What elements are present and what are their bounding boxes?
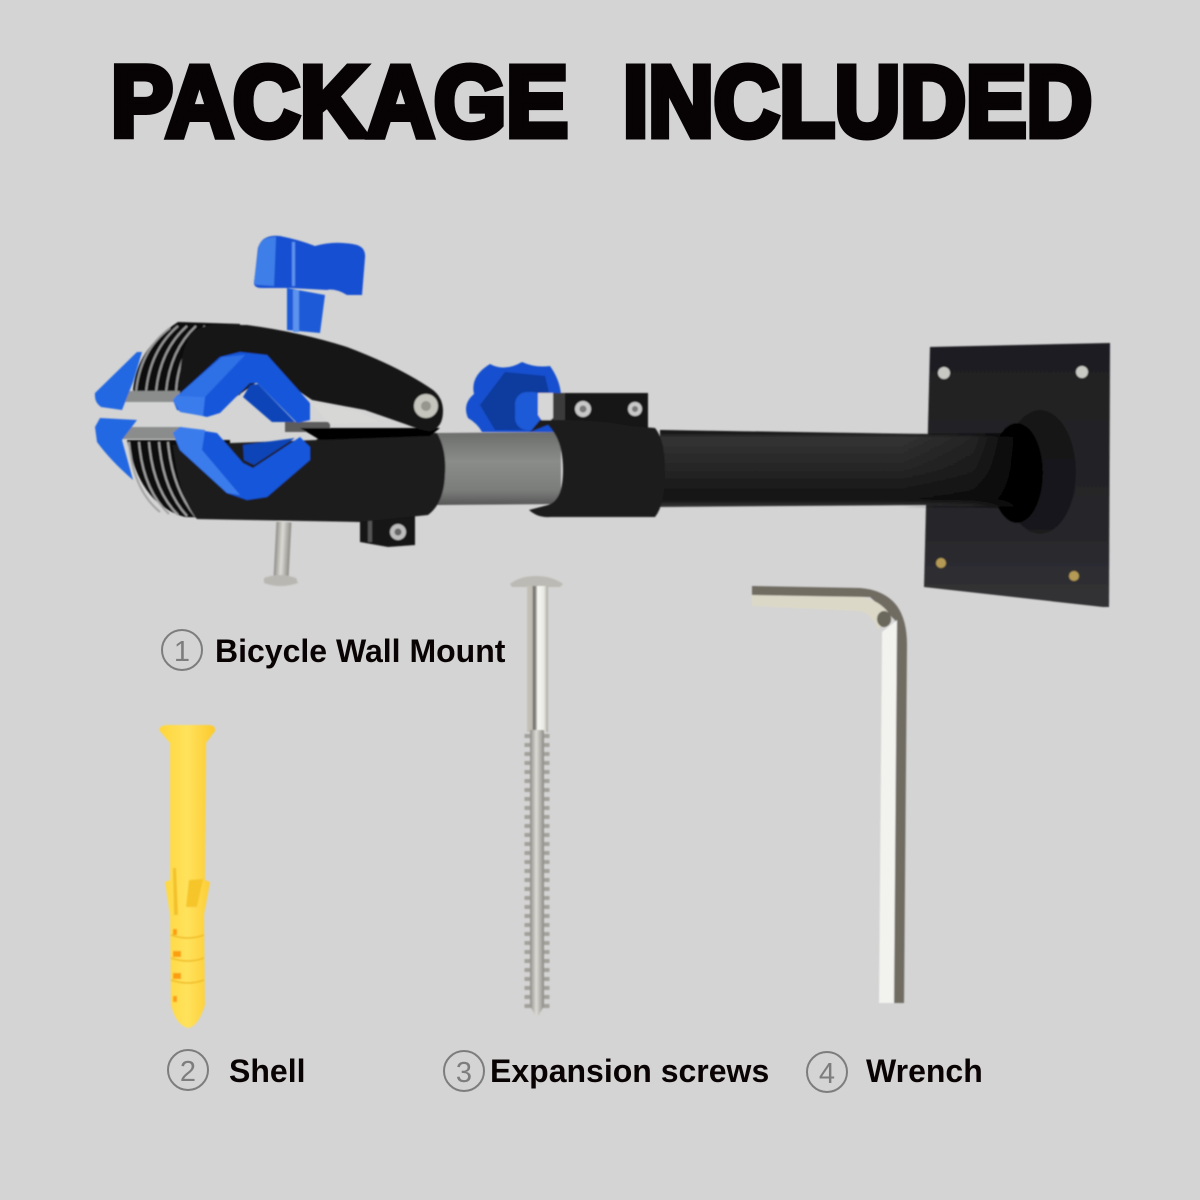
label: expansion screws: Expansion screws	[490, 1053, 769, 1089]
icon: hex wrench	[752, 586, 907, 1003]
label: expansion screws: 3	[456, 1057, 472, 1089]
lower bracket	[360, 507, 415, 547]
blue left tips	[95, 352, 142, 480]
icon: expansion screw	[510, 576, 563, 1018]
spring and pawl teeth	[285, 402, 440, 440]
fins upper	[133, 322, 240, 395]
rods	[120, 391, 182, 439]
title	[111, 46, 1092, 158]
fins lower	[127, 440, 230, 518]
bottom screw	[264, 522, 298, 586]
blue upper clamp	[173, 352, 310, 423]
label: shell	[168, 1050, 305, 1090]
gray tube	[435, 432, 561, 505]
icon: bicycle wall mount	[95, 236, 1110, 607]
label: wrench: Wrench	[866, 1053, 983, 1089]
label: shell: 2	[180, 1056, 196, 1088]
flange	[991, 423, 1043, 523]
icon: yellow wall anchor shell	[159, 725, 215, 1028]
label: bicycle wall mount: 1	[174, 636, 190, 668]
blue lower clamp	[173, 427, 310, 500]
title: PACKAGE	[111, 46, 568, 158]
blue top knob	[254, 236, 365, 333]
clamp upper arm	[180, 325, 443, 431]
collar clamp	[529, 393, 665, 517]
blue side knob	[466, 362, 561, 432]
label: wrench	[807, 1052, 983, 1092]
wall plate	[924, 343, 1110, 607]
label: bicycle wall mount: Bicycle Wall Mount	[215, 633, 506, 669]
clamp lower body	[173, 430, 445, 522]
black tube	[660, 430, 1022, 508]
title: INCLUDED	[623, 46, 1092, 158]
label: wrench: 4	[819, 1058, 835, 1090]
plate shadow	[1004, 410, 1076, 534]
label: shell: Shell	[229, 1053, 305, 1089]
pivot bolt	[414, 394, 438, 418]
